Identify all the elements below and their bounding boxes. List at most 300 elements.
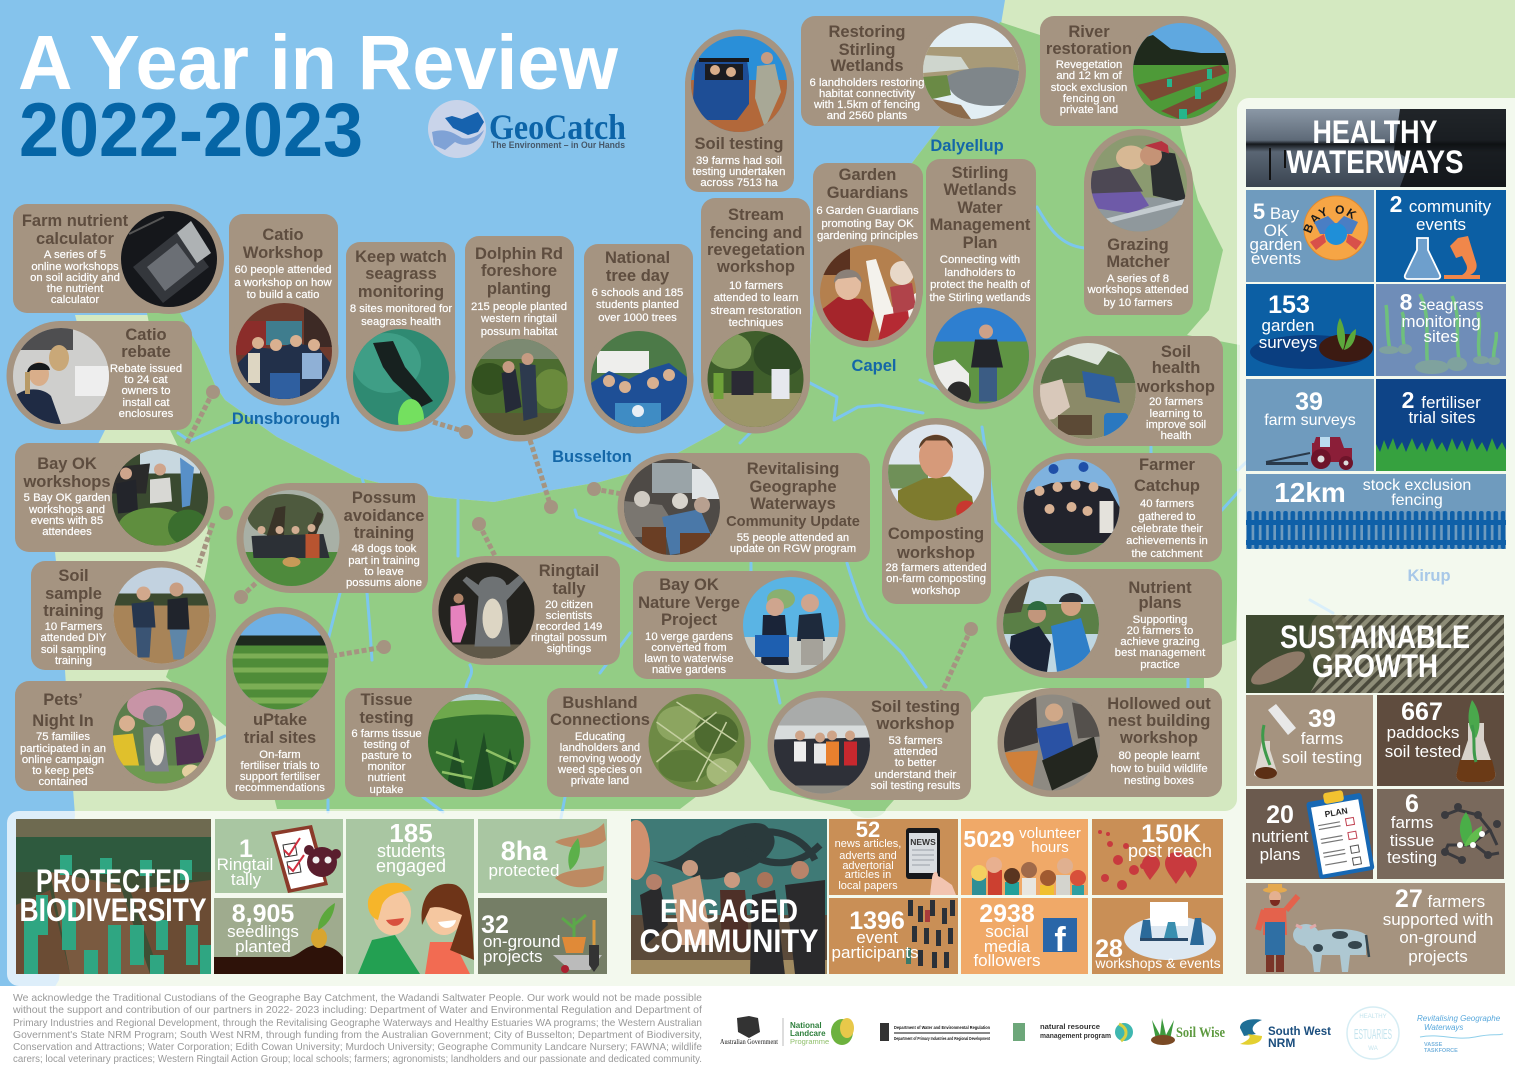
text: Rebate issued <box>110 363 182 375</box>
photo: dogs and owners <box>244 490 340 586</box>
heading: Catio <box>262 226 304 244</box>
stat: 1 Ringtail tally: tally <box>231 870 262 889</box>
panel: Soil testing <box>685 30 794 192</box>
text: owners to <box>122 385 170 397</box>
logo: Soil Wise: Soil Wise <box>1176 1025 1225 1041</box>
stat: 667 paddocks soil tested: soil tested <box>1385 742 1461 761</box>
text: Connecting with <box>940 254 1020 266</box>
stat: 2938 social media followers: social <box>985 922 1029 941</box>
icon: team meeting <box>1124 902 1216 960</box>
panel: Ringtail tally <box>432 556 620 665</box>
text: converted from <box>651 642 727 654</box>
panel: Soil testing workshop <box>768 691 971 800</box>
text: online campaign <box>22 754 104 766</box>
icon: sprout in soil <box>1319 318 1373 362</box>
heading: revegetation <box>707 241 805 259</box>
text: celebrate their <box>1131 523 1203 535</box>
logo: Government of Western Australia departments: Department of Primary Industries and Regional Development <box>894 1036 990 1041</box>
stat: 2938 social media followers <box>961 898 1088 974</box>
photo: stream site <box>708 331 806 427</box>
icon: boy <box>358 883 420 974</box>
stat: 185 students engaged: students <box>377 841 445 861</box>
connector: Ringtail tally <box>472 517 496 558</box>
heading: workshops <box>22 473 111 491</box>
logo: natural resource management program: management program <box>1040 1031 1111 1040</box>
heading: Hollowed out <box>1107 695 1211 713</box>
stat: 1 Ringtail tally: 1 <box>239 835 253 863</box>
logo: National Landcare Programme <box>783 1018 854 1046</box>
text: possums alone <box>346 577 422 589</box>
text: recommendations <box>235 782 325 794</box>
heading: tree day <box>606 267 670 285</box>
text: health <box>1161 430 1191 442</box>
place label: Dalyellup: Dalyellup <box>930 137 1004 155</box>
icon: clipboard with possum <box>271 825 341 893</box>
heading: uPtake <box>253 711 307 729</box>
stat: 5029 volunteer hours: volunteer <box>1019 825 1081 842</box>
text: gardening principles <box>817 230 918 242</box>
logo: Healthy Estuaries WA <box>1347 1007 1399 1059</box>
text: learning to <box>1150 408 1202 420</box>
logo: South West NRM: NRM <box>1268 1036 1295 1050</box>
stat: 153 garden surveys: surveys <box>1259 333 1317 352</box>
stat: 2 fertiliser trial sites: fertiliser <box>1421 393 1481 412</box>
heading: nest building <box>1108 712 1210 730</box>
photo: woody weed <box>648 694 744 790</box>
text: to better <box>895 757 936 769</box>
stat: 5 Bay OK garden events <box>1246 190 1374 282</box>
stat: 5029 volunteer hours <box>961 819 1088 895</box>
text: participated in an <box>20 743 106 755</box>
text: install cat <box>122 397 170 409</box>
stat: 8 seagrass monitoring sites: seagrass <box>1419 297 1483 314</box>
panel: River restoration <box>1040 16 1236 126</box>
stat: 39 farm surveys <box>1246 379 1374 471</box>
stat: 6 farms tissue testing <box>1377 789 1504 879</box>
text: to keep pets <box>32 765 94 777</box>
text: 8 sites monitored for <box>350 303 452 315</box>
heading: Bay OK <box>37 455 97 473</box>
connector: Keep watch seagrass <box>433 422 473 439</box>
stat: 27 farmers supported with on-ground projects: projects <box>1408 947 1468 966</box>
stat: 27 farmers supported with on-ground projects: 27 farmers <box>1395 885 1485 913</box>
heading: restoration <box>1046 40 1132 58</box>
photo: grazing workshop <box>1091 136 1193 232</box>
stat: 8,905 seedlings planted: 8,905 <box>232 900 294 928</box>
text: achievements in <box>1126 535 1208 547</box>
stat: 39 farms soil testing: 39 <box>1308 705 1336 733</box>
acknowledgement text: We acknowledge the Traditional Custodians of the Geographe Bay Catchment, the Wadandi Saltwater People. Our work would not be made possible <box>13 993 702 1004</box>
text: fertiliser trials to <box>240 760 320 772</box>
heading: Management <box>930 216 1031 234</box>
heading: River <box>1068 23 1110 41</box>
heading: workshop <box>876 715 954 733</box>
heading: Catio <box>125 326 167 344</box>
heading: Stirling <box>952 164 1008 182</box>
heading: Project <box>661 611 717 629</box>
place label: Kirup: Kirup <box>1407 567 1451 585</box>
heading: Garden <box>839 166 896 184</box>
panel: Hollowed out nest building workshop <box>998 688 1222 797</box>
photo: farmers group <box>1024 459 1120 555</box>
photo: workshop group in shed <box>774 698 870 794</box>
header image: Protected Biodiversity: PROTECTED <box>36 863 190 899</box>
text: 10 farmers <box>729 280 783 292</box>
photo: man in catio <box>13 328 109 424</box>
acknowledgement text: Conservation and Attractions; Water Corporation; Edith Cowan University; Murdoch University; Geographe Community Landcare Nursery; FAWNA; wildlife <box>13 1042 702 1053</box>
text: over 1000 trees <box>598 312 677 324</box>
photo: calculator <box>121 211 217 307</box>
header: Sustainable Growth <box>1246 610 1504 693</box>
text: training <box>55 655 92 667</box>
section: Healthy Waterways <box>1246 109 1506 549</box>
stat: 52 news articles: 52 <box>856 817 880 842</box>
header image: Protected Biodiversity <box>16 819 211 974</box>
panel: Dolphin Rd foreshore planting <box>465 236 574 442</box>
stat: 8ha protected: protected <box>489 861 559 880</box>
stat: 2 fertiliser trial sites <box>1376 379 1506 471</box>
stat: 5029 volunteer hours: 5029 <box>963 826 1015 852</box>
text: 40 farmers <box>1140 498 1194 510</box>
stat: 185 students engaged: 185 <box>389 818 433 848</box>
logo: natural resource management program: natural resource <box>1040 1022 1100 1031</box>
stat: 1396 event participants: 1396 <box>849 907 905 935</box>
heading: testing <box>359 709 414 727</box>
text: attendees <box>42 526 92 538</box>
heading: Possum <box>352 489 416 507</box>
panel: Pets' Night In <box>15 681 216 791</box>
text: 5 Bay OK garden <box>24 492 110 504</box>
title: A Year in Review <box>18 20 619 106</box>
heading: tally <box>552 580 586 598</box>
photo: soil pit <box>1040 343 1136 439</box>
text: native gardens <box>652 664 726 676</box>
text: the nutrient <box>47 283 104 295</box>
text: Revegetation <box>1056 59 1122 71</box>
stat: 5029 volunteer hours: hours <box>1031 839 1069 856</box>
icon: molecule and leaf <box>1441 803 1501 864</box>
panel: Farm nutrient calculator <box>13 204 224 314</box>
text: 20 farmers to <box>1127 625 1193 637</box>
text: a workshop on how <box>234 277 333 289</box>
text: uptake <box>370 784 403 796</box>
heading: workshop <box>1119 729 1198 747</box>
place label: Busselton: Busselton <box>552 448 632 466</box>
connector: Soil sample training <box>198 506 233 567</box>
icon: Bay OK crab badge: BAY OK <box>1303 205 1357 234</box>
logo: natural resource management program <box>1013 1022 1133 1041</box>
text: 10 Farmers <box>45 621 103 633</box>
text: nesting boxes <box>1124 775 1194 787</box>
text: techniques <box>729 317 784 329</box>
stat: 52 news articles: articles in <box>845 869 891 881</box>
icon: farmer <box>1258 884 1298 972</box>
heading: Waterways <box>750 495 836 513</box>
text: western ringtail <box>480 313 557 325</box>
panel: Possum avoidance training <box>236 483 428 593</box>
photo: families with mascot <box>113 688 209 784</box>
stat: 39 farm surveys: 39 <box>1295 388 1323 416</box>
stat: 150K post reach: post reach <box>1128 841 1212 861</box>
panel: Farmer Catchup <box>1017 453 1222 562</box>
stat: 27 farmers supported with on-ground projects: on-ground <box>1399 928 1477 947</box>
logo: GeoCatch: The Environment – in Our Hands <box>491 140 625 151</box>
text: across 7513 ha <box>700 177 778 189</box>
text: 6 Garden Guardians <box>816 205 919 217</box>
photo: two farmers in paddock <box>114 568 210 664</box>
stat: 52 news articles: adverts and <box>839 850 897 862</box>
heading: Catchup <box>1134 477 1200 495</box>
stat: 150K post reach <box>1092 819 1223 895</box>
icon: microscope <box>1444 236 1480 279</box>
heading: National <box>605 249 670 267</box>
heading: Bay OK <box>659 576 719 594</box>
heading: Geographe <box>749 478 837 496</box>
logo: Healthy Estuaries WA: WA <box>1368 1046 1378 1052</box>
heading: Nutrient <box>1128 579 1192 597</box>
stat: 39 farms soil testing: soil testing <box>1282 748 1362 767</box>
stat: 8ha protected: 8ha <box>501 836 548 866</box>
text: seagrass health <box>361 316 441 328</box>
acknowledgement text <box>12 993 702 1065</box>
heading: Farmer <box>1139 456 1196 474</box>
icon: tractor <box>1266 437 1353 470</box>
stat: 153 garden surveys: 153 <box>1268 291 1310 319</box>
stat: 8,905 seedlings planted: seedlings <box>227 922 299 941</box>
text: 39 farms had soil <box>696 155 782 167</box>
heading: Community Update <box>726 514 860 530</box>
panel: Revitalising Geographe Waterways Community Update <box>618 453 870 562</box>
stat: 1 Ringtail tally: Ringtail <box>217 855 273 874</box>
photo: trial plots <box>232 614 328 710</box>
icon: grass <box>1376 438 1506 471</box>
text: online workshops <box>31 261 119 273</box>
stat: 153 garden surveys <box>1246 284 1374 376</box>
logo: National Landcare Programme: Programme <box>790 1037 829 1046</box>
heading: workshop <box>1136 378 1215 396</box>
photo: garden guardian <box>820 245 916 341</box>
stat: 6 farms tissue testing: farms <box>1391 813 1433 832</box>
icon: Facebook: f <box>1054 921 1066 959</box>
text: attended to learn <box>714 292 798 304</box>
logo: Revitalising Geographe Waterways: Revitalising Geographe <box>1417 1014 1501 1023</box>
text: A series of 5 <box>44 249 106 261</box>
heading: planting <box>487 280 551 298</box>
icon: flask with plant <box>1456 700 1495 782</box>
section: Protected Biodiversity <box>16 818 607 974</box>
stat: 6 farms tissue testing: tissue <box>1390 831 1434 850</box>
panel: Soil sample training <box>31 561 216 670</box>
stat: 2938 social media followers: media <box>984 937 1031 956</box>
heading: health <box>1152 359 1200 377</box>
panel: Composting workshop <box>882 418 991 604</box>
text: to leave <box>364 566 404 578</box>
heading: Plan <box>963 234 997 252</box>
heading: Guardians <box>827 184 908 202</box>
text: understand their <box>875 769 957 781</box>
stat: 185 students engaged <box>346 818 474 974</box>
photo: revegetated river <box>1133 23 1229 119</box>
photo: wetlands <box>923 23 1019 119</box>
stat: 12km stock exclusion fencing <box>1246 474 1506 549</box>
heading: avoidance <box>344 507 424 525</box>
stat: 2 community events: community <box>1409 197 1492 216</box>
stat: 20 nutrient plans: nutrient <box>1252 827 1309 846</box>
stat: 8,905 seedlings planted <box>214 898 343 974</box>
icon: test tube and flask <box>1254 704 1296 779</box>
heading: Water <box>957 199 1003 217</box>
text: soil sampling <box>41 644 106 656</box>
map: small land bump <box>850 798 886 818</box>
heading: Ringtail <box>539 562 599 580</box>
stat: 1 Ringtail tally <box>215 819 343 893</box>
text: stock exclusion <box>1051 82 1127 94</box>
icon: plan clipboard: PLAN <box>1324 805 1348 819</box>
stat: 5 Bay OK garden events: OK <box>1264 221 1289 240</box>
stat: 52 news articles <box>829 817 958 895</box>
text: sightings <box>547 643 592 655</box>
text: On-farm <box>259 749 301 761</box>
heading: rebate <box>121 343 171 361</box>
connector: Soil testing workshop <box>942 622 978 692</box>
text: part in training <box>348 555 420 567</box>
photo: pasture crop <box>428 694 524 790</box>
icon: hands and plant <box>555 823 606 887</box>
stat: 667 paddocks soil tested: paddocks <box>1387 723 1459 742</box>
text: weed species on <box>557 764 642 776</box>
acknowledgement text: without the support and contribution of our partners in 2022- 2023 including: Department of Water and Environmental Regulation and Department of <box>12 1005 702 1016</box>
text: habitat connectivity <box>819 88 915 100</box>
header: Sustainable Growth: SUSTAINABLE <box>1280 619 1470 655</box>
stat: 28 workshops and events: workshops & events <box>1094 955 1221 971</box>
text: events with 85 <box>31 515 103 527</box>
text: update on RGW program <box>730 543 856 555</box>
stat: 153 garden surveys: garden <box>1262 316 1314 335</box>
panel: Bay OK workshops <box>15 443 214 552</box>
stat: 5 Bay OK garden events: 5 Bay <box>1253 199 1299 224</box>
heading: Soil testing <box>695 135 783 153</box>
logo: Healthy Estuaries WA: HEALTHY <box>1359 1014 1387 1020</box>
stat: 32 on-ground projects: on-ground <box>483 932 561 951</box>
heading: fencing and <box>710 224 802 242</box>
acknowledgement text: Primary Industries and Regional Development, through the Revitalising Geographe Waterways and Healthy Estuaries WA programs; the Western Australian <box>13 1018 702 1029</box>
header: Healthy Waterways: HEALTHY <box>1312 114 1438 150</box>
heading: seagrass <box>365 265 437 283</box>
logo: Revitalising Geographe Waterways: TASKFORCE <box>1424 1048 1458 1054</box>
connector: Revitalising Geographe Waterways <box>587 482 622 496</box>
icon: girl <box>422 884 474 974</box>
map: dark land <box>147 22 1240 809</box>
photo: audience in hall <box>624 459 720 555</box>
stat: 20 nutrient plans: 20 <box>1266 801 1294 829</box>
text: to build a catio <box>247 289 319 301</box>
logo: Revitalising Geographe Waterways <box>1417 1014 1503 1054</box>
heading: trial sites <box>244 729 316 747</box>
heading: Grazing <box>1107 236 1169 254</box>
heading: Soil <box>58 567 89 585</box>
text: promoting Bay OK <box>821 218 914 230</box>
text: workshops attended <box>1086 284 1189 296</box>
stat: 2938 social media followers: 2938 <box>979 900 1035 928</box>
text: Educating <box>575 731 625 743</box>
text: practice <box>1140 659 1180 671</box>
logo: South West NRM: South West <box>1268 1024 1331 1038</box>
section: Sustainable Growth <box>1246 610 1505 974</box>
text: landholders to <box>945 267 1015 279</box>
photo: verge garden <box>743 577 839 673</box>
text: protect the health of <box>930 279 1031 291</box>
subtitle: years: 2022-2023 <box>19 88 363 173</box>
photo: buggy <box>691 36 787 132</box>
icon: tablet with news: NEWS <box>910 837 936 847</box>
text: contained <box>38 776 88 788</box>
photo: man in olive shirt <box>888 424 984 520</box>
stat: 2 community events: 2 <box>1390 191 1402 217</box>
text: attended DIY <box>41 632 107 644</box>
stat: 150K post reach: 150K <box>1141 820 1201 848</box>
header image: Engaged Community: ENGAGED <box>660 893 798 929</box>
stat: 8 seagrass monitoring sites: monitoring <box>1401 312 1481 331</box>
text: improve soil <box>1146 419 1206 431</box>
panel: Restoring Stirling Wetlands <box>801 16 1026 126</box>
icon: crowd <box>906 900 955 968</box>
heading: Farm nutrient <box>22 212 129 230</box>
stat: 2938 social media followers: followers <box>973 951 1041 970</box>
stat: 5 Bay OK garden events: garden <box>1250 235 1302 254</box>
text: achieve grazing <box>1120 636 1200 648</box>
logo: GeoCatch: GeoCatch <box>489 107 626 147</box>
stat: 52 news articles: local papers <box>838 880 898 892</box>
icon: cow <box>1293 924 1369 972</box>
text: enclosures <box>119 408 174 420</box>
heading: sample <box>45 585 102 603</box>
heading: Stream <box>728 206 784 224</box>
heading: training <box>354 524 414 542</box>
text: recorded 149 <box>536 621 602 633</box>
text: testing undertaken <box>693 166 785 178</box>
heading: Night In <box>32 712 94 730</box>
stat: 1396 event participants: participants <box>832 943 918 962</box>
text: possum habitat <box>481 326 558 338</box>
stat: 2 fertiliser trial sites: trial sites <box>1408 408 1476 427</box>
text: 20 farmers <box>1149 396 1203 408</box>
stat: 1396 event participants <box>829 898 958 974</box>
heading: Revitalising <box>747 460 839 478</box>
text: nutrient <box>368 772 406 784</box>
panel: uPtake trial sites <box>226 607 335 800</box>
photo: farmers with notes <box>1003 576 1099 672</box>
text: gathered to <box>1138 511 1196 523</box>
icon: flask <box>1405 238 1440 279</box>
stat: 52 news articles: news articles, <box>835 838 901 850</box>
heading: Keep watch <box>355 248 447 266</box>
text: 215 people planted <box>471 301 567 313</box>
stat: 27 farmers supported with on-ground projects <box>1246 883 1505 974</box>
stat: 8 seagrass monitoring sites: sites <box>1424 327 1458 346</box>
stat: 8,905 seedlings planted: planted <box>235 937 291 956</box>
stat: 6 farms tissue testing: testing <box>1387 848 1437 867</box>
logo: Healthy Estuaries WA: ESTUARIES <box>1354 1026 1392 1043</box>
text: 80 people learnt <box>1118 750 1200 762</box>
stat: 12km stock exclusion fencing: stock exclusion <box>1363 477 1471 494</box>
stat: 2 fertiliser trial sites: 2 <box>1402 387 1414 413</box>
heading: monitoring <box>358 283 444 301</box>
icon: sprout in soil <box>214 903 343 974</box>
heading: workshop <box>896 544 975 562</box>
stat: 32 on-ground projects: 32 <box>481 911 509 939</box>
text: soil testing results <box>871 780 961 792</box>
stat: 8ha protected <box>478 819 607 893</box>
